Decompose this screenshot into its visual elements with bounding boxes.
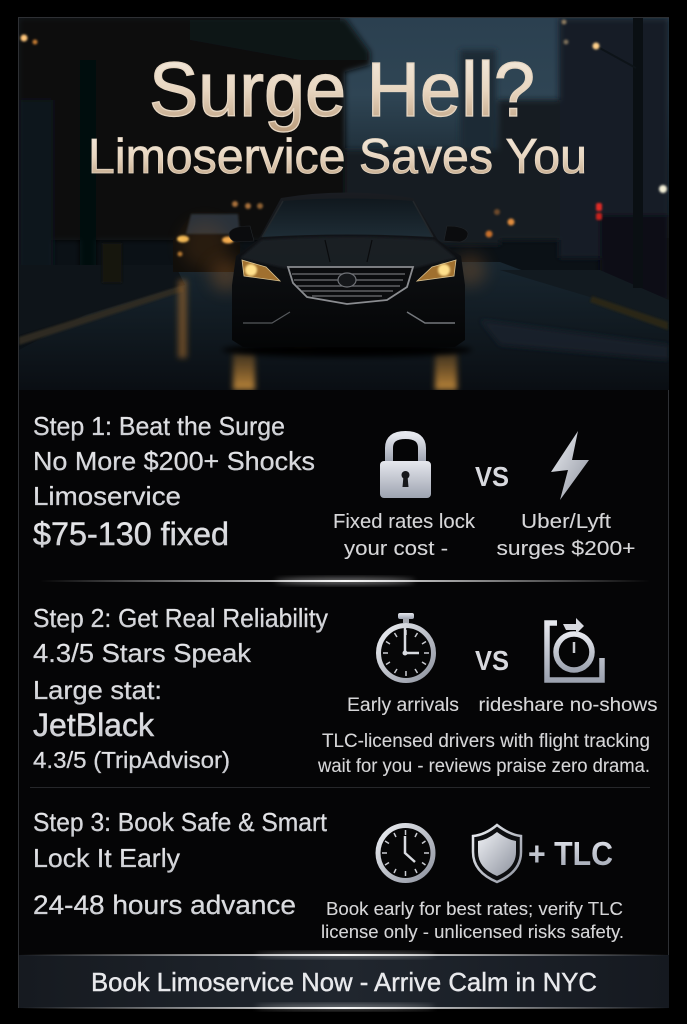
caption: uber lyft: Uber/Lyft [521,511,611,533]
title: Surge Hell? [149,47,535,133]
label: plus TLC: + TLC [528,835,613,872]
vs label: VS [475,645,509,676]
step 3 text block: Lock It Early [33,843,180,873]
body text: book early: license only - unlicensed risks safety. [321,921,624,942]
caption: rideshare no-shows: rideshare no-shows [478,695,658,716]
lower trim [243,312,290,323]
vs label: VS [475,461,509,492]
body text: TLC drivers [317,731,650,777]
title: Limoservice Saves You [88,130,587,184]
step 2 text block: 4.3/5 Stars Speak [33,638,252,668]
step 1 text block: $75-130 fixed [33,516,229,552]
caption: fixed rates: Fixed rates lock [333,511,476,533]
mirrors [229,226,254,242]
caption: early arrivals: Early arrivals [347,695,459,716]
panel: step 3 [33,807,624,942]
icon: padlock [380,435,431,498]
step 2 text block: 4.3/5 (TripAdvisor) [33,747,230,773]
icon: stopwatch [378,613,434,680]
body [232,192,465,347]
body text: book early [321,898,624,942]
title [92,59,584,174]
background lights [20,20,667,238]
step 1 text block: Limoservice [33,481,181,511]
body text: TLC drivers: wait for you - reviews praise zero drama. [317,756,650,777]
icon: shield [473,825,521,882]
icon: clock [378,826,433,880]
windshield [262,198,433,237]
sidewalks [20,265,185,314]
road [42,262,669,340]
body text: book early: Book early for best rates; verify TLC [326,898,623,919]
road reflections [178,280,669,390]
panel: call to action bar: Book Limoservice Now - Arrive Calm in NYC [91,967,597,997]
caption: fixed rates [333,511,476,560]
caption: uber lyft [496,511,636,560]
panel: call to action bar [19,952,669,1010]
step 2 text block [33,603,328,773]
step 1 text block: Step 1: Beat the Surge [33,411,285,441]
icon: no-show timer with arrow [547,618,602,680]
street pole and lamp [633,18,643,288]
caption: fixed rates: your cost - [344,538,448,560]
step 2 text block: JetBlack [33,707,155,743]
body text: TLC drivers: TLC-licensed drivers with flight tracking [322,731,650,752]
panel: step 1 [33,411,636,560]
panel: step 2 [33,603,658,777]
caption: uber lyft: surges $200+ [496,538,636,560]
panel: hero photo of car on a rainy street [19,18,670,390]
step 1 text block: No More $200+ Shocks [33,446,315,476]
second car [173,212,240,272]
car [210,192,486,357]
step 2 text block: Large stat: [33,675,162,705]
grille [288,267,413,304]
headlights [242,260,280,281]
step 1 text block [33,411,315,552]
hood [240,237,456,268]
step 3 text block: Step 3: Book Safe & Smart [33,807,328,837]
step 3 text block: 24-48 hours advance [33,890,296,920]
step 3 text block [33,807,328,920]
icon: lightning bolt [551,431,589,500]
step 2 text block: Step 2: Get Real Reliability [33,603,328,633]
